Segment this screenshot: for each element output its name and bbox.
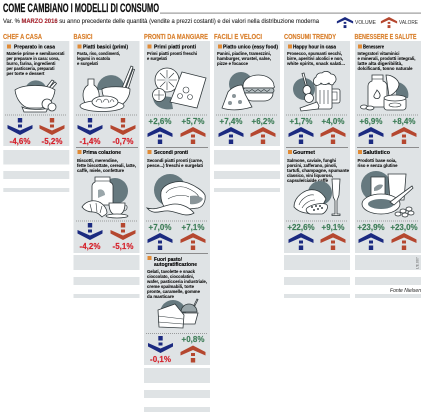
panel: piatto unico: Panini, piadine, tramezzini,	[217, 51, 272, 57]
panel: preparato in casa: per preparare in casa: uova,	[6, 56, 60, 62]
panel: piatto unico: +7,4%	[220, 117, 242, 126]
panel: preparato in casa: per torte e dessert	[6, 71, 45, 77]
panel: happy hour: Happy hour in casa	[293, 44, 337, 50]
category: basici: BASICI	[74, 32, 92, 41]
panel: salutistico: Salutistico	[363, 150, 390, 156]
panel: piatti basici: e surgelati	[77, 61, 99, 67]
panel: fuori pasto: da masticare	[147, 294, 174, 300]
panel: primi piatti pronti: +5,7%	[182, 117, 204, 126]
panel: happy hour: +1,7%	[290, 117, 312, 126]
category: facili e veloci: FACILI E VELOCI	[214, 32, 262, 41]
icon: bowl	[15, 80, 56, 112]
panel: fuori pasto: -0,1%	[150, 355, 171, 364]
panel: salutistico: riso e senza glutine	[358, 163, 398, 169]
panel: prima colazione	[76, 147, 138, 251]
icon: gourmet plate and flute	[294, 179, 340, 216]
panel: fuori pasto: cioccolato, cioccolatini,	[147, 274, 195, 280]
panel: piatto unico: hamburger, wrustel, salse,	[217, 56, 272, 62]
icon: meat and fish	[147, 174, 205, 215]
panel: prima colazione: Prima colazione	[83, 150, 122, 156]
panel: salutistico: Prodotti base soia,	[358, 158, 397, 164]
legend	[337, 17, 418, 28]
panel: benessere: Benessere	[363, 44, 385, 50]
panel: piatti basici: -0,7%	[113, 137, 133, 146]
credit: L'E.007	[416, 257, 420, 269]
panel: gourmet: porcini, zafferano, pinoli,	[287, 163, 338, 169]
panel: gourmet: tartufi, champagne, spumante	[287, 168, 349, 174]
panel: fuori pasto: pronte, caramelle, gomme	[147, 289, 200, 295]
panel: fuori pasto: Fuori pasto/	[154, 257, 182, 263]
panel: primi piatti pronti: e surgelati	[147, 56, 168, 62]
panel: gourmet: Salmone, caviale, funghi	[287, 158, 337, 164]
panel: prima colazione: fette biscottate, cereali, latte,	[77, 163, 137, 169]
icon: supplements	[360, 75, 408, 110]
icon: cake and ice cream	[158, 299, 198, 328]
panel: piatto unico: pizze e focacce	[217, 61, 248, 67]
panel: salutistico: +23,0%	[390, 223, 418, 232]
panel: secondi pronti: +7,1%	[182, 223, 204, 232]
panel: happy hour	[286, 44, 348, 144]
category: chef a casa: CHEF A CASA	[3, 32, 43, 41]
panel: secondi pronti	[146, 147, 208, 250]
panel: preparato in casa	[5, 44, 67, 146]
panel: salutistico	[357, 147, 419, 250]
panel: benessere: latte alta digeribilità,	[358, 61, 403, 67]
source: Fonte Nielsen	[390, 288, 421, 294]
panel: happy hour: birre, aperitivi alcolici e non,	[287, 56, 344, 62]
panel: happy hour: Prosecco, spumanti secchi,	[287, 51, 343, 57]
panel: primi piatti pronti	[146, 44, 208, 144]
panel: piatti basici: -1,4%	[80, 137, 100, 146]
panel: piatti basici: Piatti basici (primi)	[83, 44, 128, 50]
panel: gourmet: capsule/cialde caffè	[287, 178, 328, 184]
panel: fuori pasto: Gelati, tavolette e snack	[147, 269, 195, 275]
panel: prima colazione: caffè, miele, confetture	[77, 168, 124, 174]
panel: piatto unico: +6,2%	[252, 117, 274, 126]
panel: benessere: e minerali, prodotti integrali,	[358, 56, 416, 62]
panel: primi piatti pronti: +2,6%	[149, 117, 171, 126]
panel: preparato in casa: -5,2%	[42, 137, 62, 146]
panel: salutistico: +23,9%	[357, 223, 385, 232]
panel: fuori pasto	[146, 253, 208, 364]
panel: prima colazione: -5,1%	[113, 242, 133, 251]
panel: piatto unico: Piatto unico (easy food)	[223, 44, 278, 50]
panel: piatti basici: legumi in scatola	[77, 56, 110, 62]
panel: happy hour: +4,0%	[322, 117, 344, 126]
panel: secondi pronti: +7,0%	[149, 223, 171, 232]
panel: benessere: +8,4%	[393, 117, 415, 126]
panel: secondi pronti: Secondi pronti	[154, 150, 188, 156]
category: consumi trendy: CONSUMI TRENDY	[284, 32, 336, 41]
panel: fuori pasto: autogratificazione	[154, 262, 198, 268]
panel: fuori pasto: +0,8%	[182, 335, 204, 344]
title: COME CAMBIANO I MODELLI DI CONSUMO	[3, 3, 159, 15]
legend: VALORE	[399, 20, 418, 26]
panel: preparato in casa: Materie prime e semilavorati	[6, 51, 65, 57]
icon: soy products	[361, 171, 414, 217]
panel: piatti basici	[76, 44, 138, 146]
legend: VOLUME	[355, 20, 377, 26]
panel: preparato in casa: -4,6%	[10, 137, 30, 146]
category: pronti da mangiare: PRONTI DA MANGIARE	[144, 32, 208, 41]
panel: benessere: dolcificanti, tonno naturale	[358, 66, 413, 72]
icon: oil and spaghetti	[80, 66, 134, 112]
panel: preparato in casa: burro, farina, ingredienti	[6, 61, 56, 67]
icon: burger and pizza	[222, 72, 274, 110]
panel: gourmet: Gourmet	[293, 150, 315, 156]
panel: preparato in casa: per pasticceria, preparati	[6, 66, 55, 72]
panel: primi piatti pronti: Primi piatti pronti freschi	[147, 51, 198, 57]
panel: primi piatti pronti: Primi piatti pronti	[154, 44, 196, 50]
panel: gourmet: classico, vini liquorosi,	[287, 173, 334, 179]
panel: benessere: +6,9%	[360, 117, 382, 126]
panel: secondi pronti: Secondi piatti pronti (carne,	[147, 158, 204, 164]
panel: gourmet	[286, 147, 349, 250]
subtitle: Var. % MARZO 2016 su anno precedente delle quantità (vendite a prezzi costanti) e dei valori nella distribuzione moderna	[3, 18, 320, 25]
panel: fuori pasto: wafer, pasticceria industriale,	[146, 279, 208, 285]
panel: preparato in casa: Preparato in casa	[14, 44, 56, 50]
panel: fuori pasto: creme spalmabili, torte	[147, 284, 194, 290]
panel: piatti basici: Pasta, riso, condimenti,	[77, 51, 120, 57]
icon: beer and olives	[293, 71, 340, 111]
panel: gourmet: +22,6%	[287, 223, 315, 232]
panel: happy hour: white spirits, snack salati...	[286, 61, 346, 67]
icon: ready meals	[152, 68, 206, 109]
panel: benessere: Integratori vitaminici	[358, 51, 400, 57]
panel: prima colazione: Biscotti, merendine,	[77, 158, 119, 164]
panel: benessere	[357, 44, 419, 144]
panel: piatto unico	[216, 44, 278, 144]
icon: breakfast	[82, 177, 128, 218]
panel: secondi pronti: pesce...) freschi e surgelati	[147, 163, 204, 169]
panel: gourmet: +9,1%	[322, 223, 344, 232]
panel: prima colazione: -4,2%	[80, 242, 100, 251]
